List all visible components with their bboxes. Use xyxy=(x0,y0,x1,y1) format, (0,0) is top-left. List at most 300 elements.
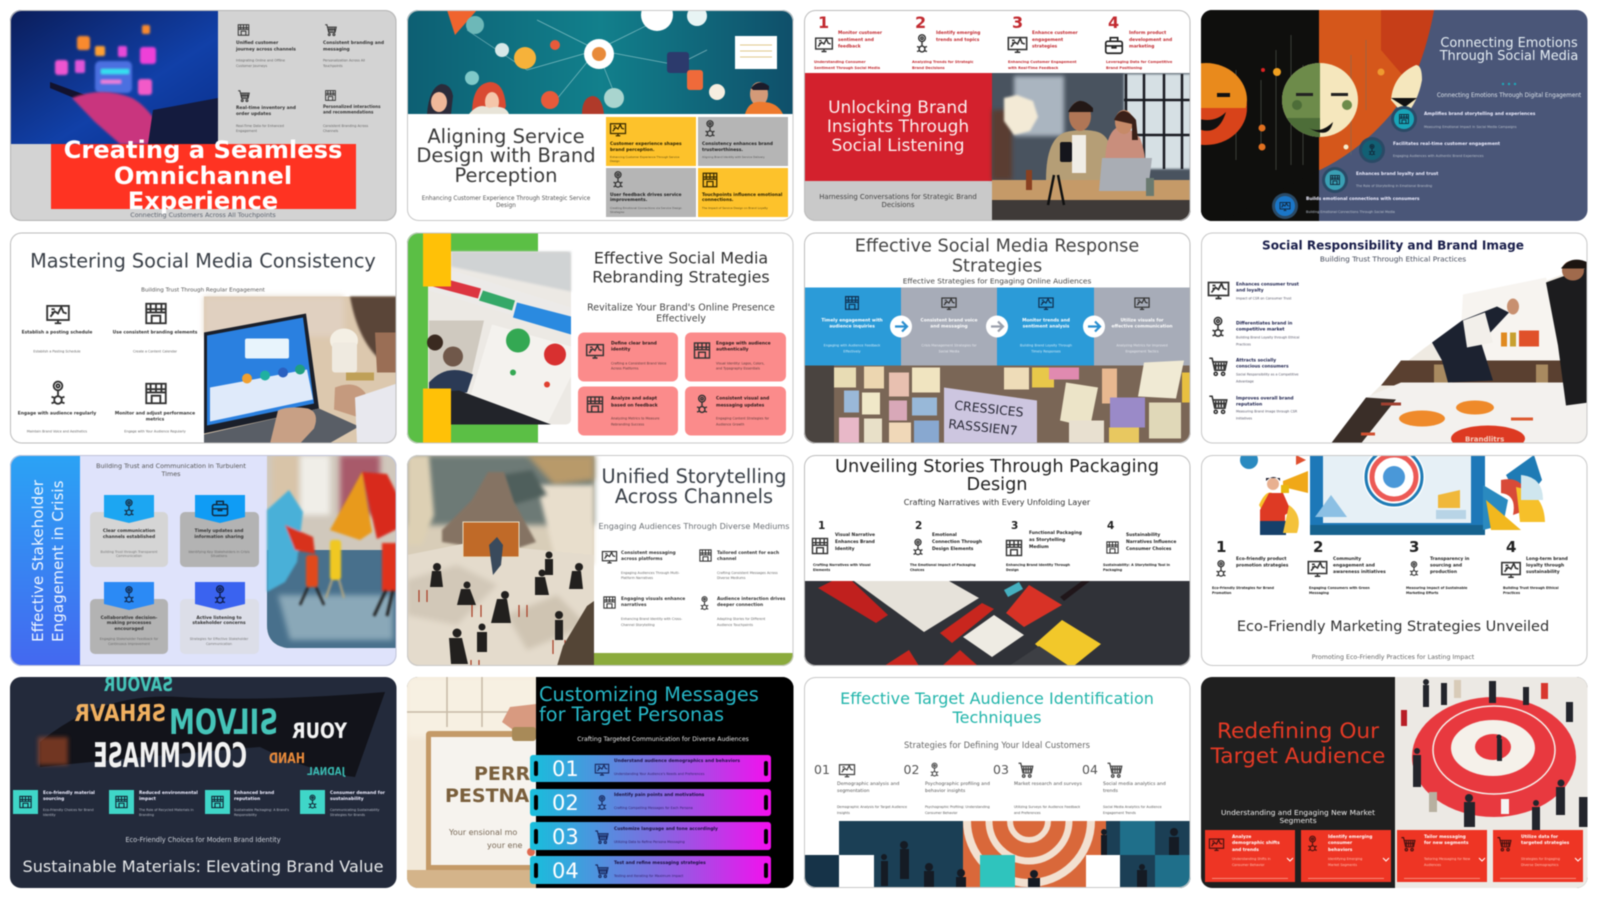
step 01: segmentation xyxy=(837,788,869,794)
step 1 xyxy=(1212,538,1289,595)
photo: team reviewing charts, curved mask xyxy=(1331,260,1588,452)
item: posting schedule: Establish a Posting Schedule xyxy=(33,350,81,354)
row 01: 01 xyxy=(552,757,579,781)
artwork: twisted typographic ribbons: CONCMMASE xyxy=(93,736,247,775)
tile: emerging behaviors xyxy=(1301,830,1391,882)
item: attracts: Attracts socially xyxy=(1236,358,1276,364)
item: amplifies: Measuring Emotional Impact in Social Media Campaigns xyxy=(1424,125,1517,129)
item: differentiates xyxy=(1212,317,1299,346)
step 03 xyxy=(993,762,1082,815)
title: Mastering Social Media Consistency xyxy=(30,250,376,272)
row 03: Utilizing Data to Refine Persona Messaging xyxy=(614,840,685,844)
tile: engage authentically: Engage with audience xyxy=(716,340,771,346)
step 2: Community xyxy=(1333,556,1361,562)
tile: visual updates: Consistent visual and xyxy=(716,396,769,402)
item: inventory: order updates xyxy=(236,111,271,117)
step 1: Monitor customer xyxy=(838,30,883,36)
item: consistent branding: messaging xyxy=(323,46,350,52)
step 1: Enhances Brand xyxy=(835,539,875,545)
item: tailored: channel xyxy=(717,556,737,562)
tile: user feedback: Strategies xyxy=(610,210,625,214)
item: reduced impact: impact xyxy=(139,796,156,802)
item: consumer trust xyxy=(1208,282,1299,300)
step 1: 1 xyxy=(818,520,825,532)
photo: toy figures with megaphones xyxy=(267,455,397,648)
title: Customizing Messages xyxy=(539,683,759,706)
item: engage: Maintain Brand Voice and Aesthetics xyxy=(27,430,87,434)
card: active listening: Strategies for Effective Stakeholder xyxy=(190,637,249,641)
subtitle: Building Trust and Communication in Turbulent xyxy=(96,462,246,470)
item: visuals: Channel Storytelling xyxy=(621,623,655,627)
step 04: Social media analytics and xyxy=(1103,781,1166,787)
panel: Customizing Messages for Target Personas xyxy=(407,677,794,888)
artwork: twisted typographic ribbons: SAVOUR xyxy=(103,674,173,697)
panel: Sustainable Materials: Elevating Brand Value xyxy=(10,674,397,888)
step 4 xyxy=(1502,538,1568,595)
tile: targeted strategies: Strategies for Engaging xyxy=(1521,857,1560,861)
step: utilize visuals: Engagement Tactics xyxy=(1125,350,1159,354)
artwork: twisted typographic ribbons: HAND xyxy=(269,751,305,767)
item: monitor: Monitor and adjust performance xyxy=(115,410,195,416)
tile: analyze: Analyze and adapt xyxy=(611,396,657,402)
step 3: 3 xyxy=(1011,520,1018,532)
step 1: Visual Narrative xyxy=(835,532,875,538)
item: consumer trust: Impact of CSR on Consumer Trust xyxy=(1236,296,1292,300)
photo: hand-held sign xyxy=(407,677,536,888)
title: for Target Personas xyxy=(539,703,724,726)
step 1: Eco-Friendly Strategies for Brand xyxy=(1212,586,1275,590)
photo: hand-held sign: PESTNA xyxy=(445,785,529,807)
item: amplifies: Amplifies brand storytelling and experiences xyxy=(1424,111,1536,117)
tile: visual updates: Engaging Content Strategies for xyxy=(716,416,770,420)
item: material sourcing xyxy=(13,790,95,817)
step 2: Emotional xyxy=(932,532,957,538)
card: active listening: Active listening to xyxy=(196,615,242,621)
artwork: twisted typographic ribbons: SRHAVR xyxy=(74,701,166,727)
tile: consistency xyxy=(698,117,788,166)
step 3: 3 xyxy=(1409,538,1419,556)
step 2: Analyzing Trends for Strategic xyxy=(912,60,973,64)
row 01 xyxy=(530,755,771,782)
item: visuals: narratives xyxy=(621,602,647,608)
item: tailored: Tailored content for each xyxy=(717,550,779,556)
tile: analyze: based on feedback xyxy=(611,402,658,408)
title: Sustainable Materials: Elevating Brand Value xyxy=(22,857,384,876)
step 4: development and xyxy=(1129,37,1172,43)
item: reduced impact xyxy=(109,790,198,817)
subtitle block: Harnessing Conversations for Strategic Brand xyxy=(819,193,977,201)
step: timely engagement: Engaging with Audience Feedback xyxy=(824,344,880,348)
green frame xyxy=(407,232,538,444)
item: reputation: Sustainable Packaging: A Brand's xyxy=(234,808,289,812)
tile: emerging behaviors: Market Segments xyxy=(1328,863,1357,867)
item: consumer trust: and loyalty xyxy=(1236,288,1264,294)
step: timely engagement xyxy=(804,288,901,366)
step 1: sentiment and xyxy=(838,37,874,43)
step 3: Transparency in xyxy=(1430,556,1469,562)
step 4: loyalty through xyxy=(1526,562,1564,568)
photo: hand-held sign: PERR xyxy=(474,763,531,785)
subtitle: Understanding and Engaging New Market xyxy=(1221,808,1375,817)
card: active listening: Communication xyxy=(206,642,232,646)
step 2 xyxy=(910,520,982,572)
card: collaboration xyxy=(90,582,168,654)
item: branding elements: Create a Content Calendar xyxy=(133,350,178,354)
item: monitor xyxy=(115,384,195,434)
step: timely engagement: Effectively xyxy=(843,350,861,354)
step 02: Psychographic profiling and xyxy=(925,781,990,787)
step 2: Design Elements xyxy=(932,546,974,552)
panel: Unveiling Stories Through Packaging Design xyxy=(804,455,1191,666)
step 04 xyxy=(1082,762,1166,815)
item: messaging xyxy=(602,550,680,580)
subtitle: Eco-Friendly Choices for Modern Brand Identity xyxy=(125,836,281,844)
step 3: engagement xyxy=(1032,37,1063,43)
tile: customer experience: Design xyxy=(610,159,620,163)
subtitle: Connecting Customers Across All Touchpoints xyxy=(130,211,276,219)
tile: analyze: Analyzing Metrics to Measure xyxy=(611,416,660,420)
step 2: 2 xyxy=(1313,538,1323,556)
item: inventory: Real-Time Data for Enhanced xyxy=(236,124,284,128)
panel: Unified Storytelling Across Channels xyxy=(407,455,794,666)
step 1: promotion strategies xyxy=(1236,562,1289,568)
step: consistent voice: Social Media xyxy=(939,350,959,354)
item: interaction: Audience interaction drives xyxy=(717,596,786,602)
tile: customer experience: Enhancing Customer Experience Through Service xyxy=(610,155,680,159)
step 03: 03 xyxy=(993,762,1009,777)
panel: Mastering Social Media Consistency xyxy=(10,232,397,444)
step 01: Demographic Analysis for Target Audience xyxy=(837,805,907,809)
item: inventory: Engagement xyxy=(236,129,258,133)
item: reputation: reputation xyxy=(234,796,260,802)
photo: sticky notes wall xyxy=(804,360,1191,444)
step 01: Demographic analysis and xyxy=(837,781,899,787)
tile: consistency: trustworthiness. xyxy=(702,147,743,153)
step 1: Understanding Consumer xyxy=(814,60,866,64)
tile: brand identity: Define clear brand xyxy=(611,340,657,346)
step 1: 1 xyxy=(818,13,829,32)
tile: user feedback xyxy=(606,168,696,217)
panel: Effective Target Audience Identification Techniques xyxy=(804,677,1191,888)
item: differentiates: Differentiates brand in xyxy=(1236,320,1292,326)
tile: consistency: Aligning Brand Identity with Service Delivery xyxy=(702,155,765,159)
item: interaction: Audience Touchpoints xyxy=(717,623,753,627)
step 2: Messaging xyxy=(1309,591,1330,595)
step 03: Utilizing Surveys for Audience Feedback xyxy=(1014,805,1080,809)
subtitle: Design xyxy=(496,203,516,209)
item: improves: Measuring Brand Image through CSR xyxy=(1236,410,1298,414)
step 3: Functional Packaging xyxy=(1029,530,1082,536)
arrow 1 xyxy=(890,316,912,338)
step 4: Practices xyxy=(1503,591,1520,595)
step: monitor trends: Building Brand Loyalty Through xyxy=(1020,344,1072,348)
item: material sourcing: Eco-Friendly Choices for Brand xyxy=(43,808,94,812)
card: timely updates: Timely updates and xyxy=(195,528,243,534)
green footer bar xyxy=(594,653,794,666)
tile: engage authentically: authentically xyxy=(716,346,749,352)
item: facilitates xyxy=(1359,137,1500,163)
step 3 xyxy=(1008,13,1078,70)
tile: touchpoints xyxy=(698,168,788,217)
item: unified journey: Integrating Online and Offline xyxy=(236,58,285,62)
tile: customer experience: Customer experience shapes xyxy=(610,141,682,147)
tile: targeted strategies: Utilize data for xyxy=(1521,834,1559,840)
step 1: Promotion xyxy=(1212,591,1232,595)
item: reputation: Enhanced brand xyxy=(234,790,274,796)
step 1 xyxy=(812,520,875,572)
tile: visual updates: messaging updates xyxy=(716,402,765,408)
card: clear communication xyxy=(90,495,168,567)
tile: tailor messaging: Audiences xyxy=(1424,863,1441,867)
tile: brand identity xyxy=(578,332,678,382)
item: demand: sustainability xyxy=(330,796,364,802)
item: demand xyxy=(300,790,386,817)
row 03 xyxy=(530,822,771,850)
tile: emerging behaviors: Identifying Emerging xyxy=(1328,857,1362,861)
title: Design xyxy=(966,475,1028,495)
tile: targeted strategies: targeted strategies xyxy=(1521,840,1570,846)
vertical title strip xyxy=(10,455,80,666)
step 1: Identity xyxy=(835,546,855,552)
card: clear communication: Clear communication xyxy=(103,528,155,534)
title: Connecting Emotions xyxy=(1440,36,1578,51)
step 3: Enhance customer xyxy=(1032,30,1078,36)
subtitle: Building Trust Through Ethical Practices xyxy=(1320,254,1466,264)
title: Techniques xyxy=(952,708,1041,727)
item: personalized interactions: Personalized interactions xyxy=(323,104,381,109)
item: enhances xyxy=(1322,167,1438,193)
artwork: twisted typographic ribbons: SILVOM xyxy=(169,702,278,743)
item: interaction: deeper connection xyxy=(717,602,763,608)
black content panel xyxy=(536,677,794,888)
item: unified journey: Unified customer xyxy=(236,40,279,46)
item: tailored: Diverse Mediums xyxy=(717,576,746,580)
item: differentiates: competitive market xyxy=(1236,326,1284,332)
step 02 xyxy=(904,762,990,815)
item: inventory xyxy=(236,91,296,133)
card: clear communication: Building Trust through Transparent xyxy=(101,550,158,554)
step 2: trends and topics xyxy=(936,37,980,43)
step 4: marketing xyxy=(1129,44,1154,50)
item: personalized interactions xyxy=(323,91,381,133)
row 03: 03 xyxy=(552,825,579,849)
item: consumer trust: Enhances consumer trust xyxy=(1236,282,1299,288)
step 1: 1 xyxy=(1216,538,1226,556)
step 4: Sustainability xyxy=(1126,532,1160,538)
subtitle block xyxy=(804,181,992,221)
photo: seated figures on clouds xyxy=(407,455,594,666)
tile: visual updates xyxy=(685,386,786,436)
subtitle: Crafting Targeted Communication for Diverse Audiences xyxy=(577,736,749,743)
step 3: as Storytelling xyxy=(1029,537,1065,543)
step: monitor trends: Monitor trends and xyxy=(1022,318,1070,324)
tile: brand identity: Crafting a Consistent Brand Voice xyxy=(611,362,666,366)
item: attracts: conscious consumers xyxy=(1236,364,1289,370)
step 2: Engaging Consumers with Green xyxy=(1309,586,1370,590)
subtitle: Times xyxy=(161,470,181,478)
step: utilize visuals: effective communication xyxy=(1112,324,1172,330)
step 4: Leveraging Data for Competitive xyxy=(1106,60,1173,64)
item: reputation xyxy=(205,790,289,817)
item: posting schedule: Establish a posting schedule xyxy=(22,330,92,336)
item: branding elements: Use consistent branding elements xyxy=(113,330,198,336)
step 02: Psychographic Profiling: Understanding xyxy=(925,805,990,809)
step 2: engagement and xyxy=(1333,562,1375,568)
step 04: Engagement Trends xyxy=(1103,811,1136,815)
item: builds: Building Emotional Connections Through Social Media xyxy=(1306,210,1395,214)
step 1: Eco-friendly product xyxy=(1236,556,1286,562)
step 01: Insights xyxy=(837,811,850,815)
tile: demographic shifts: Analyze xyxy=(1232,834,1251,840)
item: demand: Strategies for Brands xyxy=(330,813,365,817)
step 4 xyxy=(1106,13,1173,70)
step 04: trends xyxy=(1103,788,1118,794)
panel: Unlocking Brand Insights Through Social Listening xyxy=(804,10,1191,221)
step: monitor trends: sentiment analysis xyxy=(1023,324,1070,330)
step 3: production xyxy=(1430,569,1457,575)
step 2: Connection Through xyxy=(932,539,982,545)
step 3: Marketing Efforts xyxy=(1406,591,1438,595)
step: monitor trends xyxy=(997,288,1094,366)
tile: visual updates: Audience Growth xyxy=(716,422,744,426)
panel: Effective Stakeholder Engagement in Crisis xyxy=(10,455,397,666)
tile: tailor messaging: Tailoring Messaging for New xyxy=(1423,857,1470,861)
tile: touchpoints: connections. xyxy=(702,197,734,203)
item: inventory: Real-time inventory and xyxy=(236,105,296,111)
step: utilize visuals xyxy=(1094,288,1191,366)
card: timely updates: information sharing xyxy=(194,534,244,540)
item: personalized interactions: Consistent Branding Across xyxy=(323,124,369,128)
step 4: 4 xyxy=(1107,520,1114,532)
item: consistent branding: Consistent branding and xyxy=(323,40,384,46)
title: Eco-Friendly Marketing Strategies Unveiled xyxy=(1237,619,1549,635)
title: Effective Social Media Response xyxy=(855,236,1139,256)
title block: Social Listening xyxy=(831,136,965,156)
step 2: 2 xyxy=(915,520,922,532)
step 2: awareness initiatives xyxy=(1333,569,1386,575)
row 01: Understanding Your Audience's Needs and Preferences xyxy=(614,772,705,776)
item: engage xyxy=(18,382,96,434)
item: messaging: across platforms xyxy=(621,556,663,562)
tile: analyze xyxy=(578,386,678,436)
photo: hand-held sign: your ene xyxy=(487,841,523,850)
step 2: Brand Decisions xyxy=(912,66,945,70)
illustration: teal network with people xyxy=(407,0,794,114)
step: monitor trends: Timely Responses xyxy=(1030,350,1061,354)
step 02: Consumer Behavior xyxy=(925,811,958,815)
item: material sourcing: sourcing xyxy=(43,796,64,802)
step: consistent voice: Crisis Management Strategies for xyxy=(921,344,977,348)
tile: emerging behaviors: behaviors xyxy=(1328,847,1353,853)
step 4: Long-term brand xyxy=(1526,556,1568,562)
row 03: Customize language and tone accordingly xyxy=(614,826,718,832)
step: consistent voice: Consistent brand voice xyxy=(921,318,977,324)
title: Perception xyxy=(454,164,558,187)
item: consistent branding: Touchpoints xyxy=(322,64,343,68)
card: collaboration: encouraged xyxy=(114,626,144,632)
tile: brand identity: Across Platforms xyxy=(611,366,639,370)
title block: Unlocking Brand xyxy=(828,98,968,118)
title: Unveiling Stories Through Packaging xyxy=(835,457,1159,477)
row 04: Test and refine messaging strategies xyxy=(614,860,706,866)
panel: Redefining Our Target Audience xyxy=(1201,677,1588,888)
card: active listening: stakeholder concerns xyxy=(192,620,246,626)
illustration: marketer with megaphone and target screen xyxy=(1240,446,1545,535)
title banner: Experience xyxy=(128,187,278,215)
step 1 xyxy=(814,13,883,70)
row 04: Testing and Iterating for Maximum Impact xyxy=(613,874,684,878)
artwork: twisted typographic ribbons xyxy=(38,674,385,778)
subtitle: Segments xyxy=(1279,816,1317,825)
row 02: 02 xyxy=(552,791,579,815)
tile: demographic shifts: and trends xyxy=(1232,847,1259,853)
item: branding elements xyxy=(113,304,198,354)
row 04: 04 xyxy=(552,859,579,883)
panel: Effective Social Media Rebranding Strategies xyxy=(407,232,794,444)
arrow 3 xyxy=(1083,316,1105,338)
item: visuals: Engaging visuals enhance xyxy=(621,596,685,602)
title block: Insights Through xyxy=(827,117,969,137)
item: visuals xyxy=(604,596,685,627)
card: timely updates: Situations xyxy=(211,554,227,558)
row 02: Identify pain points and motivations xyxy=(614,792,705,798)
subtitle: Building Trust Through Regular Engagement xyxy=(141,288,266,294)
item: enhances: Enhances brand loyalty and trust xyxy=(1356,171,1438,177)
item: amplifies xyxy=(1391,106,1536,132)
tile: touchpoints: Touchpoints influence emotional xyxy=(702,192,783,198)
item: consistent branding xyxy=(322,25,384,68)
item: visuals: Enhancing Brand Identity with Cross- xyxy=(621,617,683,621)
step 03: and Preferences xyxy=(1014,811,1041,815)
photo: man typing at laptop xyxy=(204,296,397,444)
title: Effective Social Media xyxy=(594,248,768,268)
step 4: Brand Positioning xyxy=(1106,66,1143,70)
step 4: sustainability xyxy=(1526,569,1560,575)
card: collaboration: Engaging Stakeholder Feedback for xyxy=(100,637,159,641)
item: improves: Initiatives xyxy=(1236,416,1252,420)
tile: user feedback: Creating Emotional Connections via Service Design xyxy=(610,206,682,210)
item: unified journey xyxy=(235,25,296,68)
vertical title strip: Engagement in Crisis xyxy=(49,480,67,642)
row 04 xyxy=(530,856,771,884)
row 02: Crafting Compelling Messages for Each Persona xyxy=(614,806,693,810)
panel: Eco-Friendly Marketing Strategies Unveiled xyxy=(1201,446,1588,666)
step 04: Social Media Analytics for Audience xyxy=(1103,805,1162,809)
step: timely engagement: Timely engagement with xyxy=(821,318,883,324)
tile: demographic shifts: demographic shifts xyxy=(1232,840,1280,846)
subtitle: Crafting Narratives with Every Unfolding Layer xyxy=(904,498,1091,507)
subtitle block: Decisions xyxy=(882,201,915,209)
vertical title strip: Effective Stakeholder xyxy=(29,479,47,642)
artwork: twisted typographic ribbons: JADNAL xyxy=(306,766,346,778)
photo: creators at desk xyxy=(992,73,1191,221)
step 4: Sustainability: A Storytelling Tool in xyxy=(1103,563,1171,567)
step: timely engagement: audience inquiries xyxy=(829,324,875,330)
title: Redefining Our xyxy=(1217,719,1379,744)
step 4 xyxy=(1103,520,1176,572)
item: differentiates: Practices xyxy=(1236,342,1251,346)
item: facilitates: Engaging Audiences with Authentic Brand Experiences xyxy=(1393,154,1484,158)
title banner: Omnichannel xyxy=(114,162,292,190)
tile: demographic shifts xyxy=(1205,830,1295,882)
subtitle: Strategies for Defining Your Ideal Customers xyxy=(904,740,1090,750)
item: material sourcing: Identity xyxy=(43,813,56,817)
item: attracts: Advantage xyxy=(1236,380,1254,384)
yellow bands xyxy=(423,232,451,444)
photo: crowd over concentric target xyxy=(804,759,1191,888)
card: timely updates: Identifying Key Stakeholders in Crisis xyxy=(188,550,250,554)
tile: tailor messaging: Tailor messaging xyxy=(1424,834,1466,840)
